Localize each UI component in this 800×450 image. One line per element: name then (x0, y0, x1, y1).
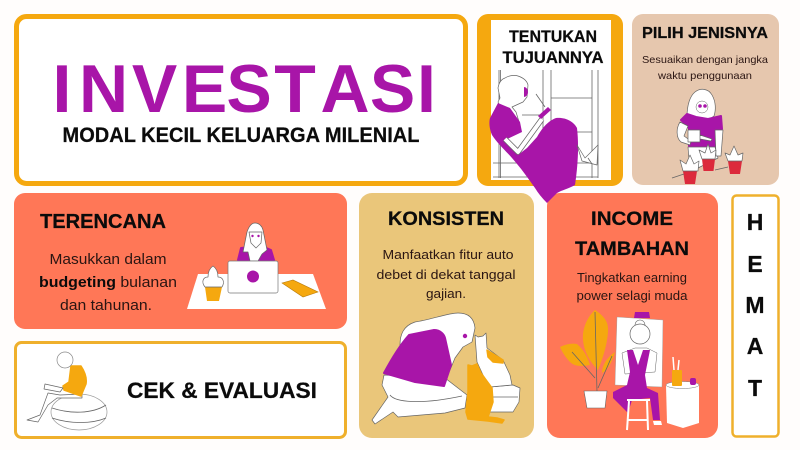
vertical heading: hemat: T (748, 375, 762, 401)
icon: woman at laptop (187, 223, 326, 309)
heading: pilih jenisnya: PILIH JENISNYA (642, 25, 768, 42)
panel: cek & evaluasi (16, 342, 346, 438)
heading: konsisten: KONSISTEN (388, 208, 504, 230)
panel: income tambahan: TAMBAHAN (575, 238, 689, 260)
heading: income tambahan: INCOME (591, 208, 673, 230)
vertical heading: hemat: H (747, 209, 763, 235)
vertical heading: hemat: A (747, 333, 763, 359)
subtitle: MODAL KECIL KELUARGA MILENIAL (62, 124, 420, 147)
panel: income tambahan (547, 193, 718, 438)
panel: konsisten (359, 193, 534, 438)
icon: woman watering plants (672, 89, 743, 184)
panel: terencana (14, 193, 347, 329)
icon: woman with cats (372, 313, 520, 424)
panel: tentukan tujuannya: TUJUANNYA (502, 49, 604, 67)
vertical heading: hemat (745, 209, 765, 401)
heading: terencana: TERENCANA (40, 211, 166, 233)
panel: konsisten: gajian. (426, 286, 466, 301)
panel: title (16, 16, 466, 184)
icon: man on beanbag (27, 352, 107, 430)
body text: Manfaatkan fitur auto (382, 247, 514, 262)
heading: tentukan tujuannya: TENTUKAN (509, 28, 597, 46)
panel: pilih jenisnya (632, 14, 779, 185)
panel: terencana: dan tahunan. (60, 297, 152, 314)
panel: konsisten: debet di dekat tanggal (376, 267, 516, 282)
panel: tentukan tujuannya (477, 14, 623, 186)
body text: Sesuaikan dengan jangka (642, 54, 768, 66)
heading: cek & evaluasi: CEK & EVALUASI (127, 378, 317, 403)
title: INVESTASI (53, 51, 436, 127)
vertical heading: hemat: M (745, 292, 765, 318)
window frame (493, 70, 598, 178)
vertical heading: hemat: E (747, 251, 763, 277)
icon: painter with plant (560, 310, 699, 430)
panel: income tambahan: power selagi muda (576, 289, 688, 303)
panel: terencana: budgeting bulanan (39, 274, 177, 291)
panel: pilih jenisnya: waktu penggunaan (657, 70, 752, 82)
body text: Tingkatkan earning (577, 271, 687, 285)
body text: Masukkan dalam (50, 251, 166, 268)
panel: hemat (732, 196, 778, 436)
icon: woman with phone at window (489, 75, 598, 203)
